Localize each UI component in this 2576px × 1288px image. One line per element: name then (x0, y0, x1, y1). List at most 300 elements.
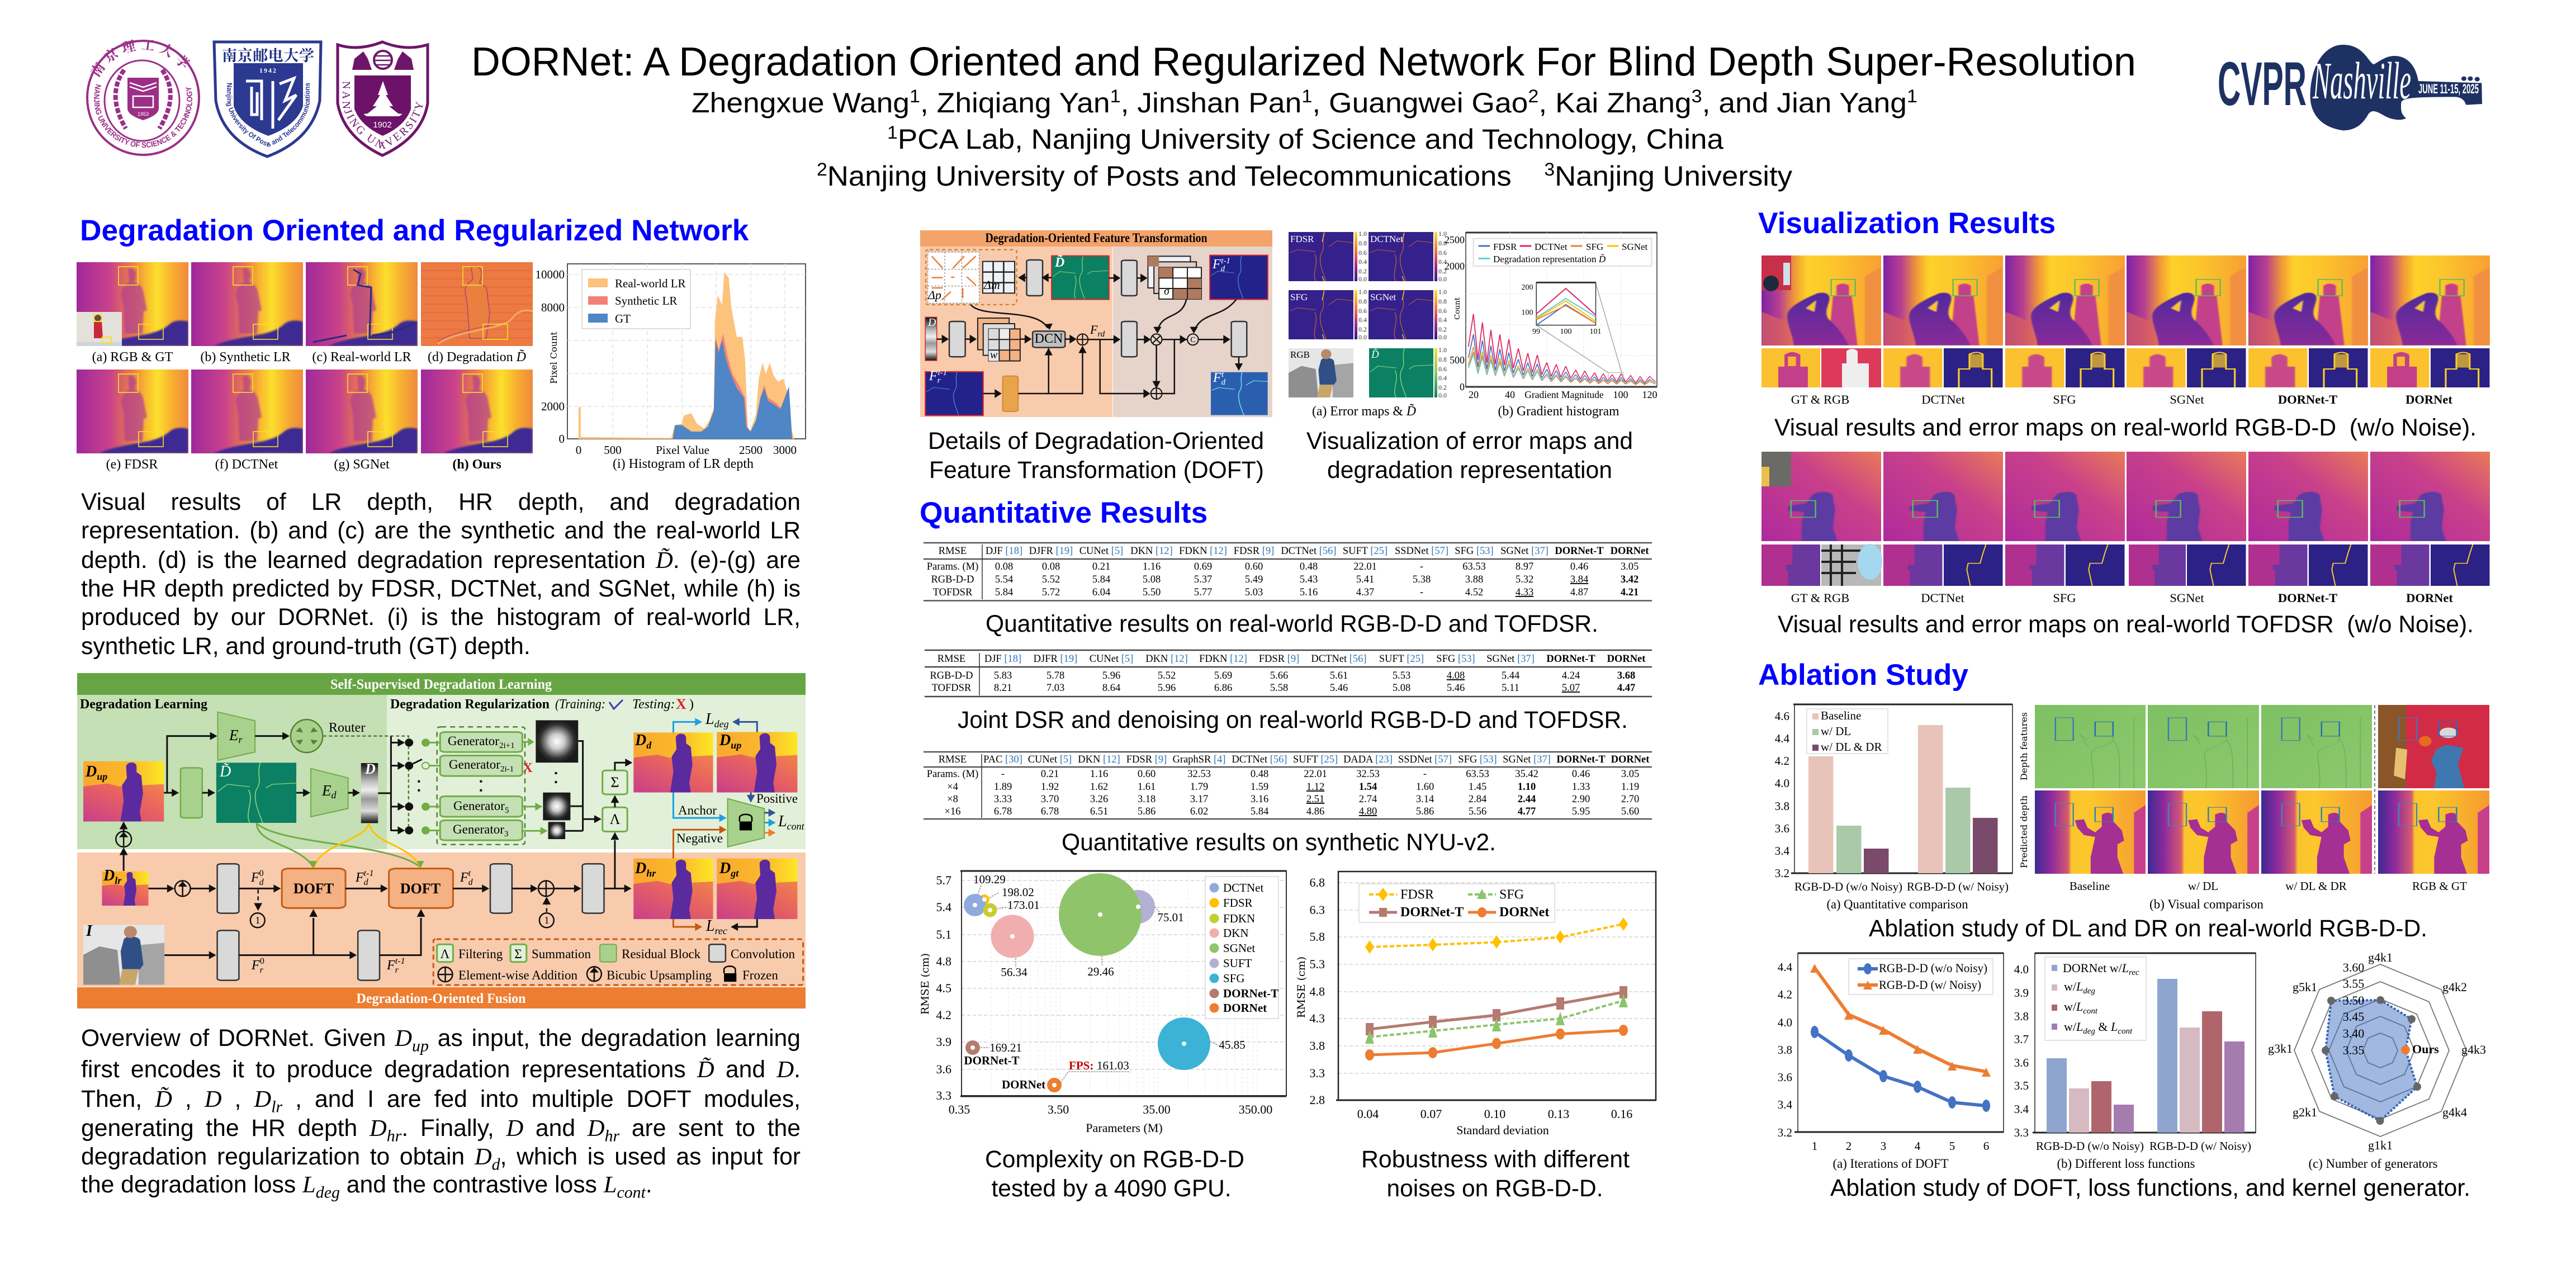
table: real-world RGB-D-D and TOFDSR: 1.16 (1143, 561, 1161, 572)
chart: complexity bubble chart: 4.2 (936, 1008, 951, 1022)
footer bar: degradation-oriented fusion (77, 987, 806, 1008)
diagram labels: r (395, 965, 399, 975)
table: real-world RGB-D-D and TOFDSR: 4.87 (1570, 587, 1588, 598)
table: joint DSR and denoising: 8.64 (1102, 683, 1120, 694)
loss legend: cont (2118, 1027, 2133, 1036)
chart: gradient histogram: 100 (1522, 309, 1533, 317)
logo: CVPR Nashville guitar: JUNE 11-15, 2025 (2418, 82, 2479, 97)
chart: quantitative comparison bars (1775, 704, 2012, 911)
DOFT labels: d (1221, 378, 1226, 387)
heading: Visualization Results: Visualization Results (1758, 207, 2056, 240)
chart: gradient histogram: 500 (1450, 354, 1465, 366)
table: synthetic NYU-v2: ×8 (947, 794, 958, 805)
table: real-world RGB-D-D and TOFDSR: DORNet-T (1555, 546, 1604, 557)
diagram legend: Σ (514, 947, 522, 961)
authors: 3 (1692, 86, 1702, 106)
table: synthetic NYU-v2: 3.14 (1416, 794, 1434, 805)
chart: gradient histogram: 100 (1560, 328, 1572, 336)
table: joint DSR and denoising: 5.52 (1158, 670, 1176, 681)
logo: CVPR Nashville guitar: Nashville (2313, 52, 2411, 110)
text block: DORNet overview description: generating the HR depth Dhr. Finally, D and Dhr are sent to the (81, 1115, 801, 1145)
diagram labels: Router (329, 721, 365, 735)
image: Ours (421, 370, 533, 453)
diagram legend (441, 947, 795, 982)
table: synthetic NYU-v2: 5.95 (1572, 806, 1590, 817)
table: joint DSR and denoising: 4.08 (1447, 670, 1465, 681)
chart: robustness line chart: 0.10 (1484, 1107, 1505, 1121)
chart: different loss functions: 3.8 (2014, 1010, 2029, 1023)
panel: visual comparison of DL and DR (2019, 705, 2489, 911)
affiliation 2 and 3: 2 (817, 159, 827, 179)
diagram labels: D (635, 860, 646, 877)
table: synthetic NYU-v2: 3.26 (1090, 794, 1108, 805)
table: joint DSR and denoising: RGB-D-D (930, 670, 973, 681)
chart: different loss functions: RGB-D-D (w/o Noisy) (2036, 1139, 2144, 1153)
diagram labels: Generator (453, 822, 504, 836)
bar legend: w/ DL (1821, 724, 1851, 738)
diagram labels: d (259, 878, 264, 887)
text block: DORNet overview description: Overview of DORNet. Given Dup as input, the degradation learning (81, 1025, 801, 1055)
chart: different loss functions: RGB-D-D (w/ Noisy) (2149, 1139, 2251, 1153)
bubble labels: 161.03 (1097, 1059, 1129, 1072)
table: joint DSR and denoising: 5.69 (1214, 670, 1232, 681)
chart: number of generators radar: 3.55 (2343, 977, 2364, 991)
image column: DCTNet (1883, 452, 2003, 586)
table: synthetic NYU-v2: 4.86 (1306, 806, 1324, 817)
diagram labels: Generator (448, 734, 499, 748)
DOFT labels: rd (1097, 330, 1105, 339)
image: RGB input (1289, 348, 1353, 397)
table: synthetic NYU-v2: 32.53 (1187, 769, 1211, 780)
table: synthetic NYU-v2: SSDNet [57] (1398, 754, 1452, 765)
chart: iterations of DOFT: 4.4 (1778, 960, 1792, 974)
diagram labels: up (97, 771, 107, 782)
affiliation 2 and 3: Nanjing University of Posts and Telecommunications (827, 160, 1544, 192)
chart: robustness line chart: 0.04 (1357, 1107, 1379, 1121)
chart: iterations of DOFT: 2 (1846, 1139, 1852, 1153)
image column: SGNet (2127, 255, 2246, 387)
panel: error maps (1289, 230, 1447, 419)
diagram labels: D (103, 867, 115, 884)
header bar: degradation-oriented feature transformation (920, 230, 1272, 247)
line: without noise (1811, 1026, 1990, 1112)
chart: gradient histogram: 40 (1505, 389, 1515, 400)
text block: depth comparison description: representation. (b) and (c) are the synthetic and the real-world LR (81, 517, 801, 544)
logo: Nanjing University of Posts and Telecommunications: Nanjing University Of Posts and Telecommunications (226, 83, 310, 146)
chart: gradient histogram: 120 (1642, 389, 1657, 400)
table: real-world RGB-D-D and TOFDSR: Params. (M) (927, 561, 978, 572)
diagram labels: 1 (544, 915, 549, 926)
bubble legend: SGNet (1223, 941, 1255, 955)
DOFT labels: t-1 (938, 368, 947, 377)
chart: gradient histogram: 0 (1460, 381, 1465, 392)
table: real-world RGB-D-D and TOFDSR: 0.08 (1042, 561, 1060, 572)
panel: error maps: 0.4 (1358, 258, 1367, 266)
image column: w/ DL (2148, 705, 2259, 874)
diagram labels: 0 (260, 956, 264, 966)
chart: iterations of DOFT: 3.2 (1778, 1126, 1792, 1139)
table: real-world RGB-D-D and TOFDSR: 4.21 (1621, 587, 1639, 598)
error map: SGNet (1368, 290, 1437, 339)
table: joint DSR and denoising: RMSE (937, 654, 965, 665)
error map: FDSR (1289, 232, 1357, 281)
chart: histogram of LR depth: 3000 (773, 443, 797, 457)
chart: number of generators radar: (c) Number of generators (2309, 1157, 2438, 1171)
bubble: SUFT (1121, 890, 1155, 924)
table: synthetic NYU-v2: 3.70 (1041, 794, 1059, 805)
chart: iterations of DOFT: 4.2 (1778, 988, 1792, 1001)
image: degradation map (421, 262, 533, 346)
table: synthetic NYU-v2: 1.59 (1251, 782, 1268, 793)
method labels (1791, 591, 2453, 605)
table: synthetic NYU-v2: 4.80 (1359, 806, 1377, 817)
chart: complexity bubble chart: 5.7 (936, 873, 951, 887)
error map: DCTNet (1368, 232, 1437, 281)
line: DORNet (1365, 1025, 1628, 1060)
chart: iterations of DOFT: 6 (1983, 1139, 1989, 1153)
table: synthetic NYU-v2: 2.84 (1469, 794, 1486, 805)
image captions: (a) RGB & GT (92, 350, 173, 364)
chart: histogram of LR depth: 500 (604, 443, 622, 457)
bubble legend: DORNet (1223, 1001, 1267, 1015)
chart: robustness line chart: Standard deviation (1456, 1123, 1549, 1137)
loss legend: cont (2083, 1007, 2098, 1016)
chart: complexity bubble chart: Parameters (M) (1086, 1121, 1163, 1135)
chart: iterations of DOFT: (a) Iterations of DOFT (1832, 1157, 1949, 1171)
table: real-world RGB-D-D and TOFDSR: RMSE (939, 546, 967, 557)
histogram legend: Real-world LR (615, 277, 686, 290)
chart: robustness line chart: 6.8 (1309, 875, 1325, 889)
diagram labels: r (260, 965, 264, 975)
diagram legend: Filtering (458, 947, 503, 961)
table: joint DSR and denoising: TOFDSR (932, 683, 972, 694)
diagram labels: F (252, 958, 260, 973)
header bar: self-supervised degradation learning (77, 673, 806, 695)
text block: depth comparison description: Visual results of LR depth, HR depth, and degradation (81, 489, 801, 515)
line chart legend: DORNet (1499, 905, 1549, 920)
chart: robustness line chart: 0.16 (1611, 1107, 1632, 1121)
loss legend: rec (2129, 968, 2139, 977)
chart: robustness line chart: 4.8 (1309, 984, 1325, 998)
diagram labels: 5 (505, 806, 509, 815)
table: synthetic NYU-v2: 5.84 (1251, 806, 1268, 817)
logo: Nanjing University of Science and Technology: 1953 (138, 111, 149, 117)
diagram labels: t-1 (395, 956, 405, 966)
bubble legend: SFG (1223, 972, 1245, 985)
table: joint DSR and denoising: 7.03 (1046, 683, 1064, 694)
table: synthetic NYU-v2: 5.60 (1621, 806, 1639, 817)
logo: Nanjing University of Science and Technology (86, 39, 200, 156)
bubble legend: FDSR (1223, 896, 1253, 910)
table: synthetic NYU-v2: SFG [53] (1458, 754, 1497, 765)
logo: Nanjing University: 1902 (373, 120, 392, 130)
diagram shapes and arrows (83, 712, 803, 985)
panel: depth comparison images (77, 262, 533, 472)
table: synthetic NYU-v2: PAC [30] (983, 754, 1022, 765)
caption: error maps visualization (1306, 428, 1633, 484)
table: synthetic NYU-v2: - (1001, 769, 1005, 780)
table: synthetic NYU-v2 (924, 752, 1652, 819)
text block: DORNet overview description: degradation regularization to obtain Dd, which is used as input for (81, 1143, 801, 1174)
bubble labels: 75.01 (1157, 911, 1184, 924)
logo: Nanjing University of Posts and Telecommunications: 南京邮电大学 (222, 47, 314, 64)
table: real-world RGB-D-D and TOFDSR: 0.21 (1092, 561, 1110, 572)
caption: error maps visualization: Visualization of error maps and (1306, 428, 1633, 454)
table: synthetic NYU-v2: 1.79 (1190, 782, 1208, 793)
bar legend (1807, 709, 1888, 754)
chart: gradient histogram: Count (1453, 297, 1462, 320)
table: real-world RGB-D-D and TOFDSR: 5.84 (995, 587, 1013, 598)
caption: RGB-D-D visual results: Visual results and error maps on real-world RGB-D-D (w/o Noise). (1774, 414, 2476, 441)
authors: , Jinshan Pan (1121, 87, 1301, 119)
table: joint DSR and denoising: 5.46 (1447, 683, 1465, 694)
diagram legend: Summation (532, 947, 591, 961)
DOFT labels: F (1213, 371, 1221, 385)
chart: histogram of LR depth: Pixel Value (656, 443, 709, 457)
table: synthetic NYU-v2: RMSE (939, 754, 967, 765)
table: synthetic NYU-v2: 0.60 (1138, 769, 1156, 780)
table: real-world RGB-D-D and TOFDSR: 5.32 (1516, 574, 1533, 585)
authors: , Kai Zhang (1538, 87, 1692, 119)
table: synthetic NYU-v2: 1.89 (994, 782, 1012, 793)
table: real-world RGB-D-D and TOFDSR: DKN [12] (1130, 546, 1173, 557)
caption: robustness: Robustness with different (1361, 1146, 1630, 1173)
caption: TOFDSR visual results: Visual results and error maps on real-world TOFDSR (w/o Noise). (1778, 611, 2474, 638)
caption: complexity: Complexity on RGB-D-D (985, 1146, 1244, 1173)
line: DORNet-T (1366, 986, 1627, 1035)
diagram labels: 0 (259, 869, 264, 878)
diagram labels: DOFT (400, 880, 441, 897)
chart: complexity bubble chart: 3.6 (936, 1062, 951, 1076)
chart: iterations of DOFT: 5 (1949, 1139, 1955, 1153)
chart: different loss functions: 3.7 (2014, 1033, 2029, 1046)
error map: FDSR: FDSR (1290, 234, 1314, 244)
authors: 1 (910, 86, 920, 106)
table: joint DSR and denoising: 5.07 (1562, 683, 1580, 694)
table: joint DSR and denoising: 5.61 (1330, 670, 1348, 681)
method labels (1791, 392, 2452, 406)
table: real-world RGB-D-D and TOFDSR: FDKN [12] (1179, 546, 1227, 557)
chart: number of generators radar: g4k3 (2461, 1043, 2486, 1057)
table: real-world RGB-D-D and TOFDSR: - (1420, 561, 1423, 572)
image captions: (c) Real-world LR (312, 350, 411, 364)
image: degradation representation (1369, 348, 1437, 397)
table: joint DSR and denoising: 5.96 (1158, 683, 1176, 694)
bar legend: w/ DL & DR (1821, 740, 1882, 754)
panel: error maps: 0.8 (1358, 239, 1367, 247)
panel: visual comparison of DL and DR: RGB & GT (2412, 879, 2467, 893)
diagram labels: X (676, 696, 686, 712)
image captions: (d) Degradation D̃ (428, 349, 526, 364)
chart: quantitative comparison bars: 3.2 (1775, 866, 1789, 880)
authors: , Guangwei Gao (1312, 87, 1528, 119)
table: real-world RGB-D-D and TOFDSR: 0.46 (1570, 561, 1588, 572)
image column: SFG (2005, 452, 2125, 586)
text block: DORNet overview description (81, 1024, 801, 1220)
table: real-world RGB-D-D and TOFDSR: 4.33 (1516, 587, 1533, 598)
diagram labels: F (251, 870, 259, 885)
table: real-world RGB-D-D and TOFDSR: SSDNet [57] (1395, 546, 1448, 557)
diagram labels: Negative (676, 831, 723, 845)
image captions: (f) DCTNet (215, 457, 278, 472)
table: synthetic NYU-v2: 2.74 (1359, 794, 1377, 805)
table: joint DSR and denoising: DORNet (1607, 654, 1646, 665)
affiliation 2 and 3: Nanjing University (1555, 160, 1792, 192)
DOFT labels: Δp (927, 288, 941, 302)
table: real-world RGB-D-D and TOFDSR: 5.54 (995, 574, 1013, 585)
panel: error maps: 0.2 (1358, 267, 1367, 275)
caption: DOFT details: Feature Transformation (DOFT) (929, 457, 1264, 484)
panel: DORNet framework diagram (77, 673, 806, 1008)
table: synthetic NYU-v2: 22.01 (1304, 769, 1327, 780)
panel: visual results on TOFDSR (1761, 452, 2490, 605)
table: real-world RGB-D-D and TOFDSR: 5.38 (1413, 574, 1431, 585)
authors: , and Jian Yang (1702, 87, 1907, 119)
DOFT labels: D (927, 316, 936, 329)
affiliation 2 and 3: 3 (1544, 159, 1555, 179)
table: joint DSR and denoising: 4.47 (1617, 683, 1635, 694)
chart: gradient histogram (1445, 233, 1657, 419)
diagram labels: Generator (449, 757, 500, 771)
table: real-world RGB-D-D and TOFDSR: 3.05 (1621, 561, 1639, 572)
bubble labels: DORNet (1002, 1078, 1045, 1091)
DOFT shapes and arrows (925, 250, 1268, 415)
chart: different loss functions: (b) Different loss functions (2057, 1157, 2195, 1171)
caption: DL and DR ablation: Ablation study of DL and DR on real-world RGB-D-D. (1869, 915, 2427, 942)
bubble: DORNet-T (965, 1040, 980, 1055)
chart: iterations of DOFT: 3 (1881, 1139, 1886, 1153)
image: DCTNet (191, 370, 303, 453)
panel: error maps: (a) Error maps & D̃ (1312, 404, 1416, 419)
heading: Quantitative Results: Quantitative Results (920, 496, 1208, 529)
table: real-world RGB-D-D and TOFDSR: 5.16 (1300, 587, 1318, 598)
error map: SFG: SFG (1290, 292, 1308, 302)
table: synthetic NYU-v2: DORNet-T (1556, 754, 1606, 765)
chart: robustness line chart: 0.07 (1420, 1107, 1442, 1121)
chart: number of generators radar: g3k1 (2268, 1041, 2293, 1055)
chart: quantitative comparison bars: 4.0 (1775, 776, 1789, 790)
text block: depth comparison description: the HR depth predicted by FDSR, DCTNet, and SGNet, while (h) is (81, 575, 801, 602)
diagram legend: Frozen (742, 968, 778, 982)
error map: SFG (1289, 290, 1357, 339)
bubble: DORNet (1047, 1078, 1062, 1092)
table: synthetic NYU-v2: Params. (M) (927, 769, 978, 780)
DOFT labels: t-1 (1221, 257, 1230, 266)
line chart legend: SFG (1499, 888, 1524, 902)
bubble legend (1205, 877, 1278, 1019)
chart: different loss functions: 3.5 (2014, 1079, 2029, 1092)
diagram labels: d (646, 740, 652, 751)
table: joint DSR and denoising: 8.21 (994, 683, 1012, 694)
diagram legend: Convolution (731, 947, 795, 961)
chart: quantitative comparison bars: 3.6 (1775, 822, 1789, 835)
table: synthetic NYU-v2: 4.77 (1518, 806, 1536, 817)
method labels: DORNet (2405, 392, 2452, 406)
table: real-world RGB-D-D and TOFDSR: 3.88 (1465, 574, 1483, 585)
bar legend: Baseline (1821, 709, 1861, 722)
diagram labels: L (778, 813, 787, 830)
diagram labels: F (356, 870, 364, 885)
line: SFG (1365, 994, 1628, 1044)
loss legend: & (2095, 1020, 2111, 1034)
chart: number of generators radar: g4k4 (2442, 1105, 2467, 1119)
table: synthetic NYU-v2: 1.61 (1138, 782, 1156, 793)
authors: 1 (1110, 86, 1121, 106)
table: synthetic NYU-v2: 2.51 (1306, 794, 1324, 805)
DOFT labels: t (1221, 370, 1224, 379)
panel: degradation regularization background (387, 695, 806, 849)
table: joint DSR and denoising: DCTNet [56] (1311, 654, 1367, 665)
chart: iterations of DOFT: 1 (1812, 1139, 1817, 1153)
diagram labels: 1 (255, 915, 261, 926)
chart: complexity bubble chart: RMSE (cm) (919, 953, 931, 1015)
loss legend (2045, 957, 2146, 1040)
chart: gradient histogram: 200 (1522, 283, 1533, 292)
DOFT labels: F (1090, 323, 1097, 337)
text block: DORNet overview description: first encodes it to produce degradation representations D̃ and D. (81, 1056, 801, 1083)
table: synthetic NYU-v2: 6.51 (1090, 806, 1108, 817)
table: joint DSR and denoising: 6.86 (1214, 683, 1232, 694)
diagram legend: Λ (441, 947, 450, 961)
chart: iterations of DOFT: 3.8 (1778, 1043, 1792, 1057)
logo: Nanjing University of Posts and Telecommunications (212, 40, 323, 158)
heading: Degradation Oriented and Regularized Network: Degradation Oriented and Regularized Network (80, 214, 749, 247)
loss legend: w/L (2064, 979, 2083, 993)
diagram labels: D (719, 860, 731, 877)
chart: gradient histogram: 101 (1590, 328, 1601, 336)
chart: robustness line chart: 2.8 (1309, 1093, 1325, 1107)
caption: complexity: tested by a 4090 GPU. (992, 1175, 1231, 1202)
bubble: SGNet (1059, 873, 1142, 956)
chart: iterations of DOFT: 4.0 (1778, 1016, 1792, 1029)
caption: DOFT details (928, 428, 1264, 484)
iterations legend: RGB-D-D (w/ Noisy) (1879, 978, 1981, 992)
chart: gradient histogram: 100 (1613, 389, 1628, 400)
text block: depth comparison description: produced by our DORNet. (i) is the histogram of real-world LR, (81, 604, 801, 631)
panel: visual comparison of DL and DR: w/ DL & DR (2285, 879, 2347, 893)
table: joint DSR and denoising: CUNet [5] (1090, 654, 1133, 665)
diagram labels: t-1 (364, 869, 373, 878)
table: synthetic NYU-v2: ×4 (947, 782, 958, 793)
method labels: DORNet-T (2278, 392, 2337, 406)
chart: complexity bubble chart: 5.1 (936, 927, 951, 941)
table: synthetic NYU-v2: DKN [12] (1078, 754, 1120, 765)
chart: number of generators radar: 3.35 (2343, 1043, 2364, 1057)
chart: gradient histogram: Degradation representation D̃ (1493, 254, 1606, 264)
authors: 2 (1528, 86, 1538, 106)
table: real-world RGB-D-D and TOFDSR: 63.53 (1462, 561, 1486, 572)
DOFT labels: D̃ (1054, 255, 1064, 270)
diagram labels: L (706, 917, 715, 935)
table: synthetic NYU-v2: 1.10 (1518, 782, 1536, 793)
diagram labels: lr (115, 875, 122, 886)
DOFT labels: w (990, 349, 998, 361)
chart: complexity bubble chart: 350.00 (1239, 1102, 1272, 1116)
caption: table 1: Quantitative results on real-world RGB-D-D and TOFDSR. (986, 610, 1598, 637)
chart: gradient histogram: Gradient Magnitude (1524, 389, 1604, 400)
chart: quantitative comparison bars: 4.2 (1775, 754, 1789, 768)
table: synthetic NYU-v2: 3.17 (1190, 794, 1208, 805)
histogram legend (582, 269, 690, 329)
diagram labels: d (364, 878, 369, 887)
table: synthetic NYU-v2: DADA [23] (1343, 754, 1393, 765)
table: real-world RGB-D-D and TOFDSR: 6.04 (1092, 587, 1110, 598)
table: joint DSR and denoising: DKN [12] (1145, 654, 1188, 665)
chart: robustness line chart: 3.8 (1309, 1039, 1325, 1053)
table: real-world RGB-D-D and TOFDSR: - (1420, 587, 1423, 598)
logo: Nanjing University of Posts and Telecommunications: 1942 (259, 67, 277, 74)
diagram labels: 2i+1 (499, 741, 515, 750)
